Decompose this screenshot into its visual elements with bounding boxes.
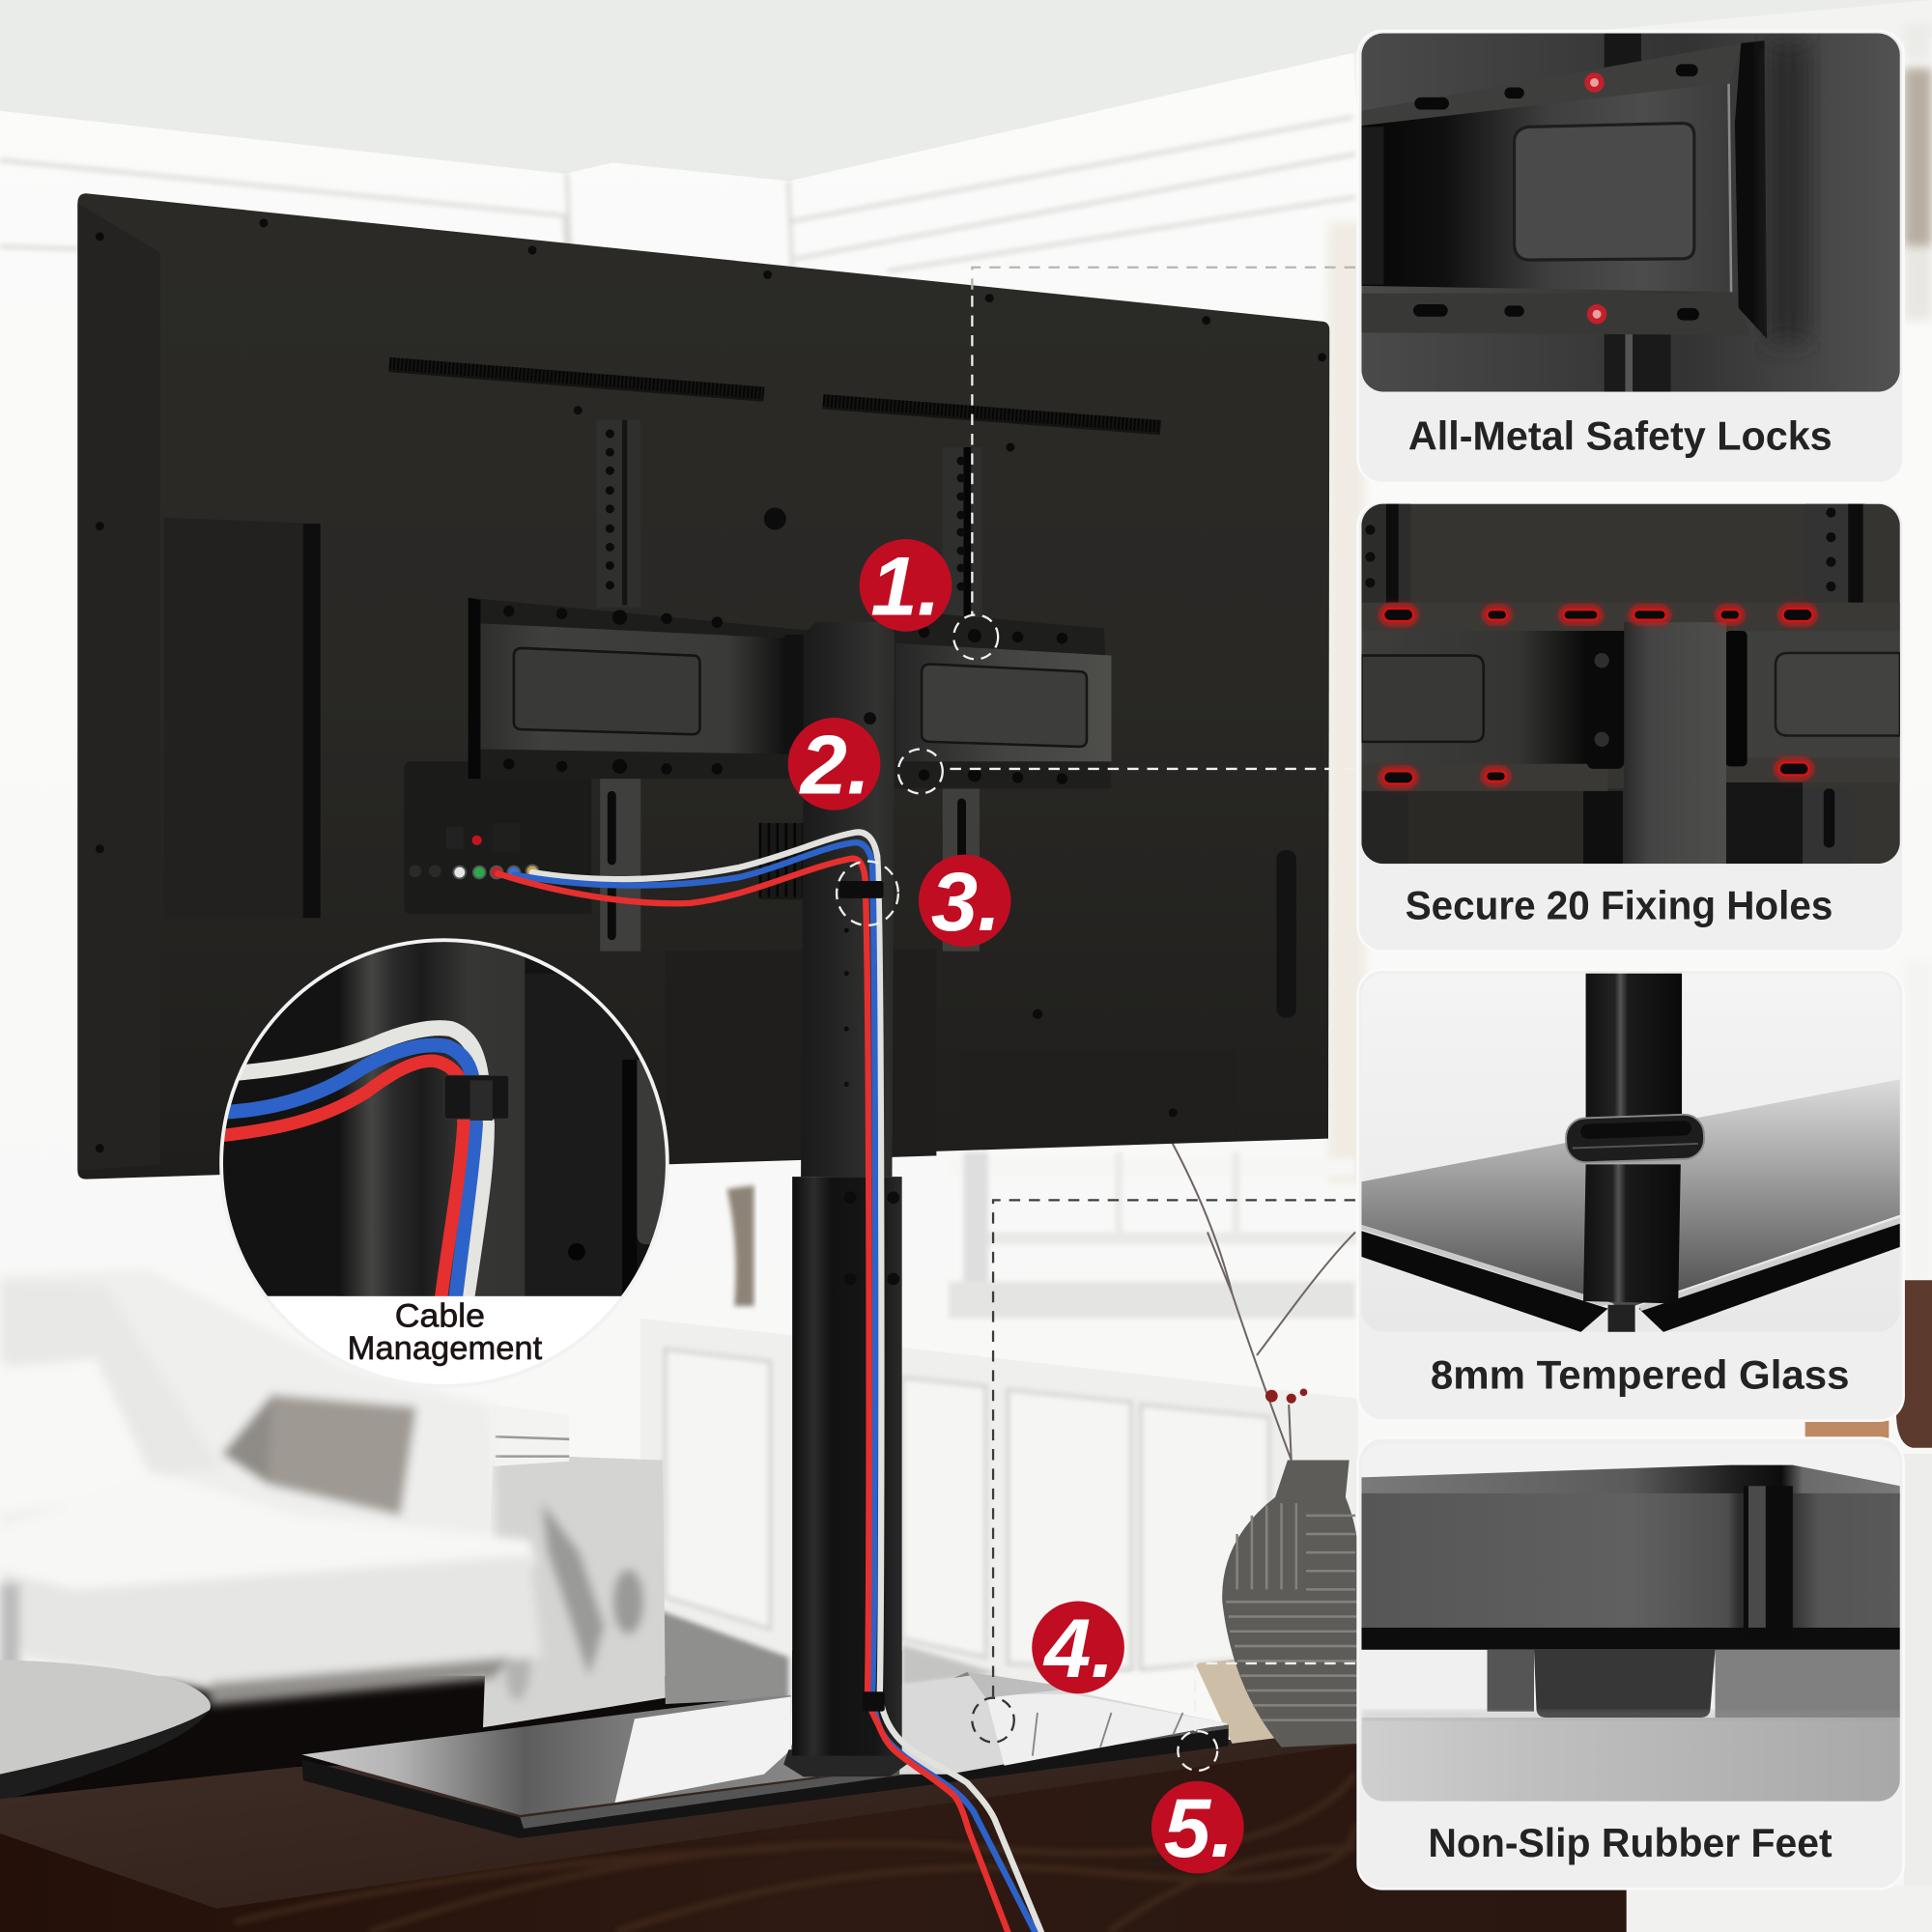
lower column (792, 1177, 902, 1756)
round coffee table (0, 1660, 211, 1802)
inset caption: Cable (395, 1298, 485, 1335)
inset caption: Management (348, 1330, 543, 1367)
white cabinets (640, 1319, 1358, 1719)
label: All-Metal Safety Locks (1408, 413, 1833, 459)
cables on the stand (497, 832, 1041, 1932)
right plate (894, 610, 1112, 788)
card: secure 20 fixing holes (1358, 501, 1904, 952)
books (493, 1405, 569, 1466)
label: Non-Slip Rubber Feet (1428, 1820, 1833, 1865)
plate holes (503, 606, 1067, 784)
leader 5 (1195, 1663, 1355, 1735)
stand column (783, 622, 907, 1776)
highlighted holes (1382, 608, 1814, 784)
badge 1: 1. (870, 539, 941, 633)
ceiling (0, 0, 1932, 182)
vents (389, 363, 1161, 428)
wall mount bracket (469, 420, 1112, 952)
badge 4: 4. (1042, 1602, 1115, 1695)
ports panel (404, 761, 591, 914)
right edge cabinet (1614, 1280, 1932, 1932)
wooden table (0, 1700, 1627, 1932)
badge 2: 2. (799, 718, 870, 811)
target circles (953, 614, 998, 659)
ring (1565, 1114, 1705, 1163)
leader 4 (993, 1200, 1355, 1698)
cable management inset (210, 936, 678, 1395)
branches and berries (1171, 1140, 1355, 1460)
black under sofa (0, 1676, 788, 1805)
card: all-metal safety locks (1358, 31, 1904, 483)
label: Secure 20 Fixing Holes (1406, 883, 1833, 928)
card: 8mm tempered glass (1358, 970, 1904, 1421)
statue on shelf (727, 1185, 754, 1306)
badge 3: 3. (931, 855, 1001, 949)
TV back panel (77, 193, 1329, 1179)
embossed panel (1515, 124, 1694, 260)
sofa (0, 1269, 542, 1705)
marble side table (483, 1454, 666, 1727)
badge 5: 5. (1164, 1781, 1234, 1875)
label: 8mm Tempered Glass (1431, 1352, 1850, 1398)
cable clips (839, 881, 884, 898)
leader 1 (972, 268, 1355, 292)
glass base (301, 1651, 1229, 1838)
red locks (1584, 72, 1606, 324)
numbered badges (788, 539, 1244, 1875)
dashed leader lines (837, 268, 1355, 1771)
vertical rails (596, 420, 982, 952)
inset caption (348, 1298, 543, 1367)
beige wall reflection behind base (1195, 1658, 1282, 1744)
left plate (469, 598, 813, 779)
leader 2 (943, 768, 1355, 770)
vase (1222, 1460, 1358, 1747)
window light right of TV (1328, 25, 1932, 1282)
post (1586, 974, 1682, 1123)
left recess with labels (164, 518, 321, 918)
upper column (783, 635, 815, 748)
hatched vents beside column (759, 823, 804, 899)
card: non-slip rubber feet (1358, 1438, 1904, 1889)
window below TV (949, 1152, 1358, 1319)
screws on TV (96, 218, 1326, 1152)
